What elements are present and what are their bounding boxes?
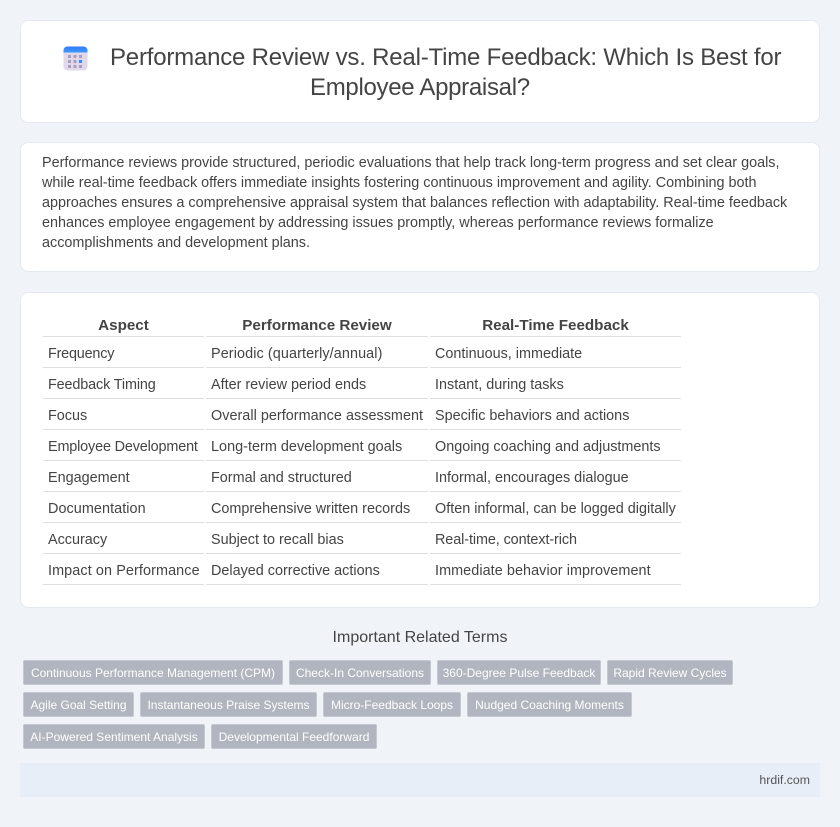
panel: title card bbox=[20, 20, 820, 123]
related term tags: Instantaneous Praise Systems bbox=[147, 698, 310, 712]
related term tags: Check-In Conversations bbox=[296, 666, 424, 680]
title bbox=[110, 44, 782, 101]
comparison table bbox=[43, 317, 681, 585]
comparison table: Delayed corrective actions bbox=[211, 563, 380, 579]
comparison table: Subject to recall bias bbox=[211, 532, 344, 548]
intro text: enhances employee engagement by addressing issues promptly, whereas performance reviews formalize bbox=[42, 215, 714, 231]
comparison table: Ongoing coaching and adjustments bbox=[435, 439, 661, 455]
comparison table: Impact on Performance bbox=[48, 563, 200, 579]
related term tags: AI-Powered Sentiment Analysis bbox=[30, 730, 198, 744]
comparison table: Aspect bbox=[98, 317, 149, 334]
comparison table: Informal, encourages dialogue bbox=[435, 470, 629, 486]
related term tags: Rapid Review Cycles bbox=[613, 666, 727, 680]
intro text: while real-time feedback offers immediate insights fostering continuous improvement and agility. Combining both bbox=[42, 175, 757, 191]
title: Performance Review vs. Real-Time Feedback: Which Is Best for bbox=[110, 44, 781, 71]
comparison table: Specific behaviors and actions bbox=[435, 408, 629, 424]
title: Employee Appraisal? bbox=[310, 74, 530, 101]
icon: calendar bbox=[64, 46, 88, 70]
related term tags: 360-Degree Pulse Feedback bbox=[443, 666, 595, 680]
comparison table: Documentation bbox=[48, 501, 146, 517]
comparison table: Feedback Timing bbox=[48, 377, 156, 393]
comparison table: After review period ends bbox=[211, 377, 366, 393]
intro text bbox=[42, 155, 788, 251]
related term tags: Developmental Feedforward bbox=[219, 730, 369, 744]
intro text: Performance reviews provide structured, periodic evaluations that help track long-term progress and set clear goals, bbox=[42, 155, 779, 171]
comparison table: Formal and structured bbox=[211, 470, 352, 486]
comparison table: Focus bbox=[48, 408, 87, 424]
comparison table: Instant, during tasks bbox=[435, 377, 564, 393]
related term tags bbox=[23, 660, 733, 749]
comparison table: Often informal, can be logged digitally bbox=[435, 501, 676, 517]
comparison table: Continuous, immediate bbox=[435, 346, 582, 362]
comparison table: Long-term development goals bbox=[211, 439, 402, 455]
comparison table: Real-time, context-rich bbox=[435, 532, 577, 548]
comparison table: Engagement bbox=[48, 470, 130, 486]
comparison table: Comprehensive written records bbox=[211, 501, 410, 517]
comparison table: Immediate behavior improvement bbox=[435, 563, 651, 579]
heading: related terms: Important Related Terms bbox=[333, 629, 507, 646]
related term tags: Micro-Feedback Loops bbox=[331, 698, 453, 712]
footer bbox=[20, 763, 820, 797]
comparison table: Employee Development bbox=[48, 439, 198, 455]
comparison table: Accuracy bbox=[48, 532, 107, 548]
related term tags: Continuous Performance Management (CPM) bbox=[31, 666, 275, 680]
comparison table: Real-Time Feedback bbox=[482, 317, 629, 334]
intro text: accomplishments and development plans. bbox=[42, 235, 310, 251]
intro text: approaches ensures a comprehensive appraisal system that balances reflection with adaptability. Real-time feedback bbox=[42, 195, 787, 211]
related term tags: Agile Goal Setting bbox=[30, 698, 127, 712]
panel: intro bbox=[20, 142, 820, 272]
comparison table: Frequency bbox=[48, 346, 114, 362]
comparison table: Periodic (quarterly/annual) bbox=[211, 346, 382, 362]
panel: comparison table bbox=[20, 292, 820, 608]
comparison table: Performance Review bbox=[242, 317, 392, 334]
related term tags: Nudged Coaching Moments bbox=[475, 698, 624, 712]
comparison table: Overall performance assessment bbox=[211, 408, 423, 424]
footer source: hrdif.com bbox=[759, 773, 810, 787]
